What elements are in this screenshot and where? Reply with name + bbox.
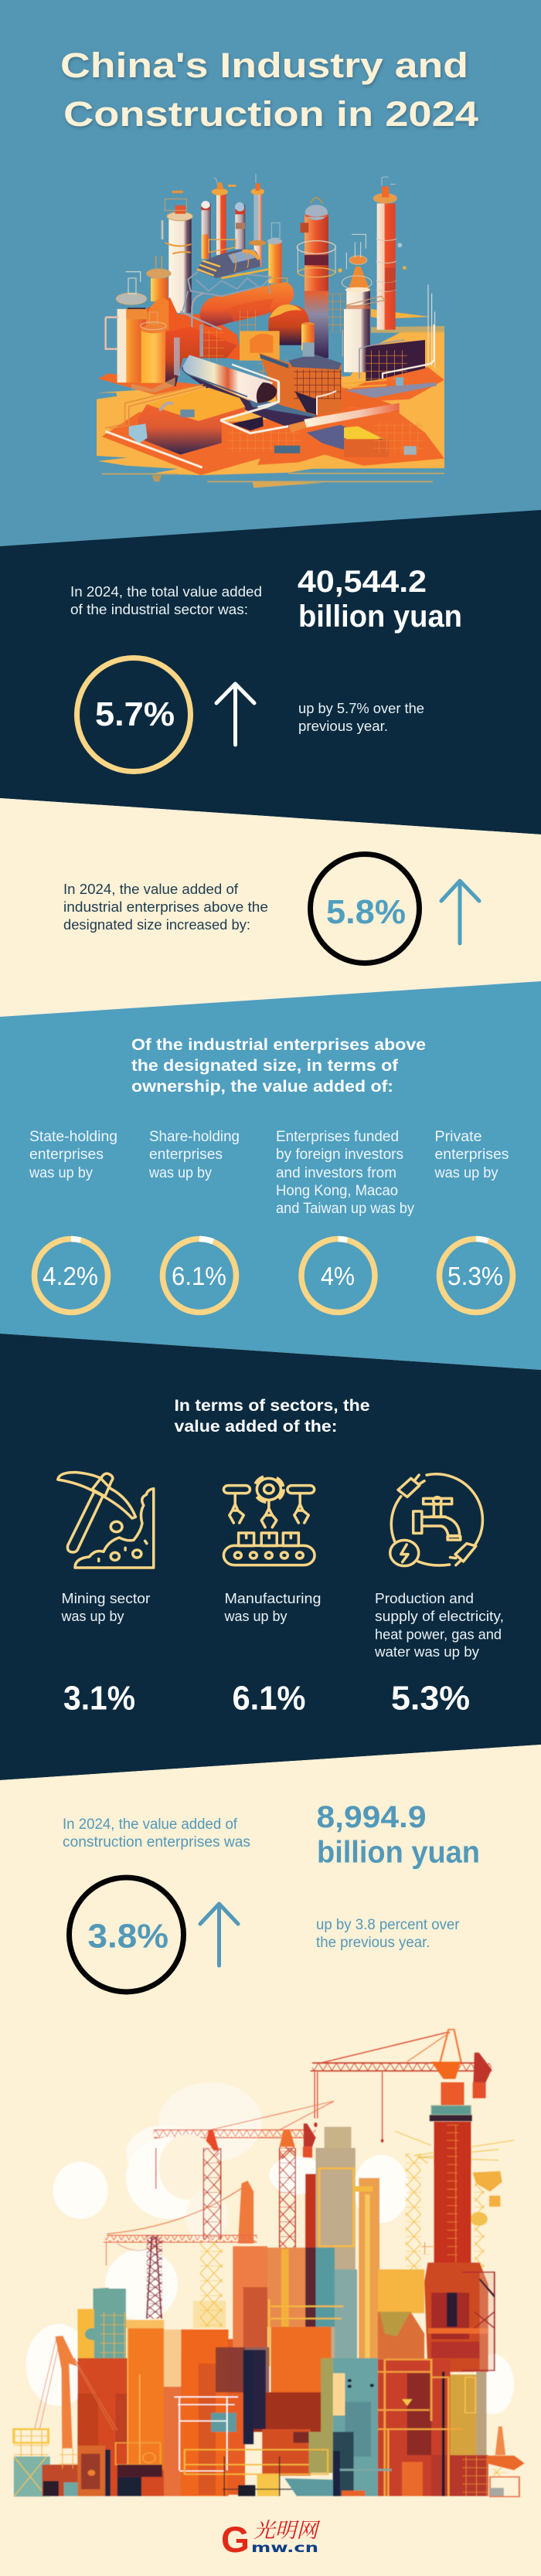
label: state-holding [29,1129,117,1181]
text: up by 5.7% [298,701,424,734]
donut: 6.1%: 6.1% [172,1262,226,1290]
heading: sectors: value added of the: [175,1418,337,1436]
heading: ownership: ownership, the value added of: [131,1078,393,1096]
text: up by 5.7%: previous year. [298,719,388,734]
label: manufacturing: Manufacturing [224,1591,322,1606]
text: designated size: In 2024, the value added of [63,882,239,897]
panel: header [0,0,541,547]
stat ring: 5.8% [311,855,419,963]
stat: 8,994.9 billion yuan: 8,994.9 [317,1800,427,1834]
label: utilities: Production and [375,1591,474,1606]
text: designated size: designated size increased by: [63,917,250,933]
stat: 8,994.9 billion yuan: billion yuan [317,1836,480,1870]
illustration: refinery factory [97,174,444,488]
stat: 6.1%: 6.1% [232,1680,306,1717]
illustration: construction skyline [14,2030,525,2496]
icon: utilities tap and plugs [390,1474,482,1566]
label: foreign funded: by foreign investors [276,1147,403,1163]
stat: 40,544.2 billion yuan [298,565,462,634]
arrow: up [441,881,479,943]
heading: ownership: Of the industrial enterprises above [131,1036,426,1054]
icon: factory conveyor [223,1477,315,1565]
label: mining [61,1591,151,1624]
label: share-holding [148,1129,240,1181]
label: utilities: heat power, gas and [375,1627,502,1643]
donut: 5.3% [439,1239,513,1312]
logo: Guangming Online [221,2519,321,2560]
text: up by 5.7%: up by 5.7% over the [298,701,424,716]
donut: 4.2%: 4.2% [43,1262,98,1290]
logo: Guangming Online: mw.cn [251,2540,318,2556]
donut: 5.3%: 5.3% [447,1262,503,1290]
title [60,46,478,134]
donut: 4%: 4% [321,1262,355,1290]
label: private: was up by [434,1165,498,1181]
logo: Guangming Online: G [221,2519,250,2560]
label: foreign funded: and Taiwan up was by [276,1201,414,1217]
label: private: enterprises [434,1147,509,1163]
lower half of refinery [106,272,437,467]
stat: 40,544.2 billion yuan: 40,544.2 [298,565,427,599]
panel: industrial value added [0,510,541,834]
text: up by 3.8 percent: up by 3.8 percent over [316,1917,460,1933]
text: designated size: industrial enterprises above the [63,899,268,915]
stat ring: 3.8%: 3.8% [88,1918,168,1955]
label: manufacturing: was up by [224,1609,288,1624]
label: utilities: supply of electricity, [375,1609,504,1624]
stat: 3.1%: 3.1% [63,1680,135,1717]
arrow: up [200,1904,238,1966]
panel: ownership [0,981,541,1370]
logo: Guangming Online: 光明网 [253,2519,321,2542]
stat ring: 5.7%: 5.7% [95,695,175,733]
text: up by 3.8 percent: the previous year. [316,1935,430,1951]
heading: sectors: In terms of sectors, the [175,1397,369,1415]
title: Construction in 2024 [63,94,478,134]
panel: enterprises above designated size [0,798,541,1017]
text: construction value added: construction enterprises was [63,1834,250,1850]
text: construction value added: In 2024, the value added of [63,1816,238,1833]
label: share-holding: was up by [148,1165,212,1181]
stat ring: 5.7% [77,658,190,771]
text: up by 3.8 percent [316,1917,460,1951]
label: private: Private [434,1129,482,1145]
label: private [434,1129,509,1181]
stat ring: 5.8%: 5.8% [326,893,406,931]
label: share-holding: enterprises [149,1147,223,1163]
panel: construction [0,1745,541,2576]
label: state-holding: State-holding [29,1129,117,1145]
text: designated size [63,882,268,933]
text: construction value added [63,1816,250,1850]
label: utilities [374,1591,504,1660]
label: foreign funded: and investors from [276,1165,396,1181]
panel: sectors [0,1334,541,1780]
label: utilities: water was up by [374,1644,479,1660]
donut: 4% [301,1239,375,1312]
label: manufacturing [224,1591,322,1624]
label: mining: was up by [61,1609,124,1624]
label: state-holding: was up by [29,1165,93,1181]
icon: pickaxe and rock [58,1473,154,1568]
text: total value added: of the industrial sector was: [70,602,248,617]
stat: 5.3%: 5.3% [391,1680,470,1717]
stat: 40,544.2 billion yuan: billion yuan [298,600,462,634]
text: total value added [70,584,262,617]
stat: 8,994.9 billion yuan [317,1800,480,1870]
label: state-holding: enterprises [29,1147,104,1163]
heading: sectors [175,1397,369,1436]
heading: ownership [131,1036,426,1096]
heading: ownership: the designated size, in terms of [131,1057,399,1075]
label: foreign funded: Enterprises funded [276,1129,399,1145]
donut: 4.2% [34,1239,108,1312]
stat ring: 3.8% [70,1878,184,1992]
text: total value added: In 2024, the total value added [70,584,262,600]
arrow: up [216,684,254,745]
label: share-holding: Share-holding [149,1129,240,1145]
label: foreign funded [276,1129,414,1217]
donut: 6.1% [162,1239,236,1312]
label: foreign funded: Hong Kong, Macao [276,1183,398,1199]
label: mining: Mining sector [62,1591,151,1606]
title: China's Industry and [60,46,468,85]
